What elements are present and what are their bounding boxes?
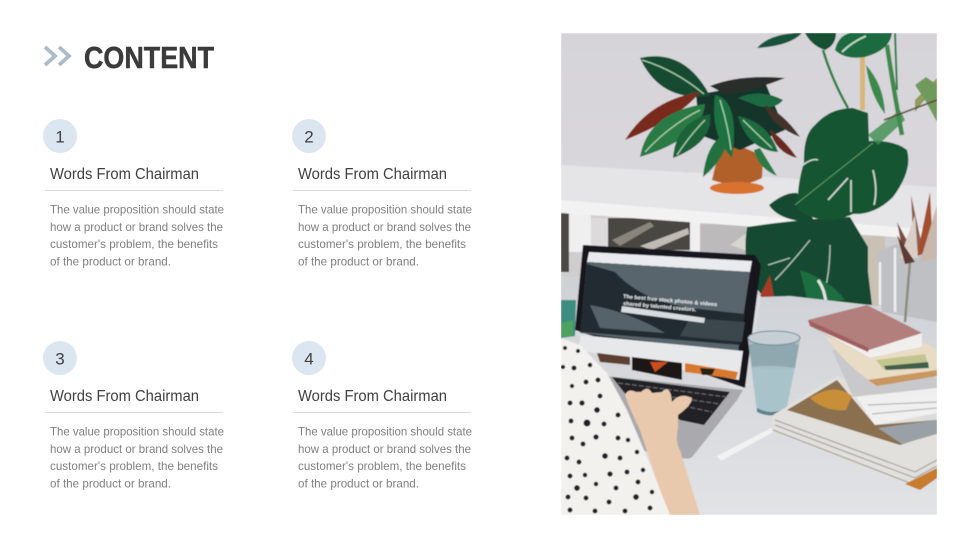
- title: CONTENT: [84, 40, 214, 75]
- photo: laptop on desk with plants and books: shared by talented creators.: [623, 301, 697, 313]
- laptop screen: [575, 245, 761, 388]
- panel: item 2: [292, 119, 472, 268]
- body text 3: [50, 424, 224, 490]
- body text 1: how a product or brand solves the: [50, 220, 223, 234]
- panel: item 3: [43, 341, 224, 490]
- body text 3: how a product or brand solves the: [50, 442, 223, 456]
- laptop base: [605, 376, 743, 459]
- body text 2: customer's problem, the benefits: [298, 237, 466, 251]
- calathea leaves: [625, 56, 800, 177]
- panel: item 4: [292, 341, 472, 490]
- plant stems: [823, 33, 902, 135]
- person: polka-dot shirt: [561, 338, 670, 515]
- number badge 2: 2: [304, 128, 314, 146]
- number badge 3: 3: [55, 350, 65, 368]
- calathea plant pot: [712, 146, 764, 184]
- body text 4: The value proposition should state: [298, 424, 472, 438]
- body text 4: how a product or brand solves the: [298, 442, 471, 456]
- number badge 2: [292, 119, 326, 153]
- number badge 1: 1: [55, 128, 65, 146]
- body text 1: The value proposition should state: [50, 202, 224, 216]
- desk: [562, 279, 936, 348]
- heading 1: Words From Chairman: [50, 166, 199, 183]
- monstera leaves: [745, 100, 937, 305]
- keyboard: [612, 377, 730, 425]
- body text 3: The value proposition should state: [50, 424, 224, 438]
- magazine stack: [772, 376, 937, 490]
- water glass: [748, 331, 800, 416]
- panel: item 1: [43, 119, 224, 268]
- top leaves: [757, 33, 802, 48]
- photo: laptop on desk with plants and books: [561, 33, 937, 515]
- glass vase with succulent: [877, 192, 937, 322]
- icon: double chevron: [45, 47, 69, 65]
- body text 3: customer's problem, the benefits: [50, 459, 218, 473]
- person: arm and hand: [625, 389, 700, 515]
- body text 4: customer's problem, the benefits: [298, 459, 466, 473]
- number badge 3: [43, 341, 77, 375]
- book stack: [808, 305, 937, 425]
- number badge 4: 4: [304, 350, 314, 368]
- body text 4: of the product or brand.: [298, 476, 419, 490]
- body text 2: The value proposition should state: [298, 202, 472, 216]
- heading 4: Words From Chairman: [298, 388, 447, 405]
- body text 4: [298, 424, 472, 490]
- photo: laptop on desk with plants and books: The best free stock photos & videos: [623, 294, 717, 308]
- body text 2: how a product or brand solves the: [298, 220, 471, 234]
- number badge 1: [43, 119, 77, 153]
- body text 2: of the product or brand.: [298, 254, 419, 268]
- pencil: [717, 427, 775, 461]
- heading 3: Words From Chairman: [50, 388, 199, 405]
- cubbies under shelf: [561, 216, 900, 295]
- heading 2: Words From Chairman: [298, 166, 447, 183]
- body text 1: [50, 202, 224, 268]
- shelf: [561, 165, 937, 230]
- body text 1: of the product or brand.: [50, 254, 171, 268]
- body text 3: of the product or brand.: [50, 476, 171, 490]
- body text 1: customer's problem, the benefits: [50, 237, 218, 251]
- number badge 4: [292, 341, 326, 375]
- body text 2: [298, 202, 472, 268]
